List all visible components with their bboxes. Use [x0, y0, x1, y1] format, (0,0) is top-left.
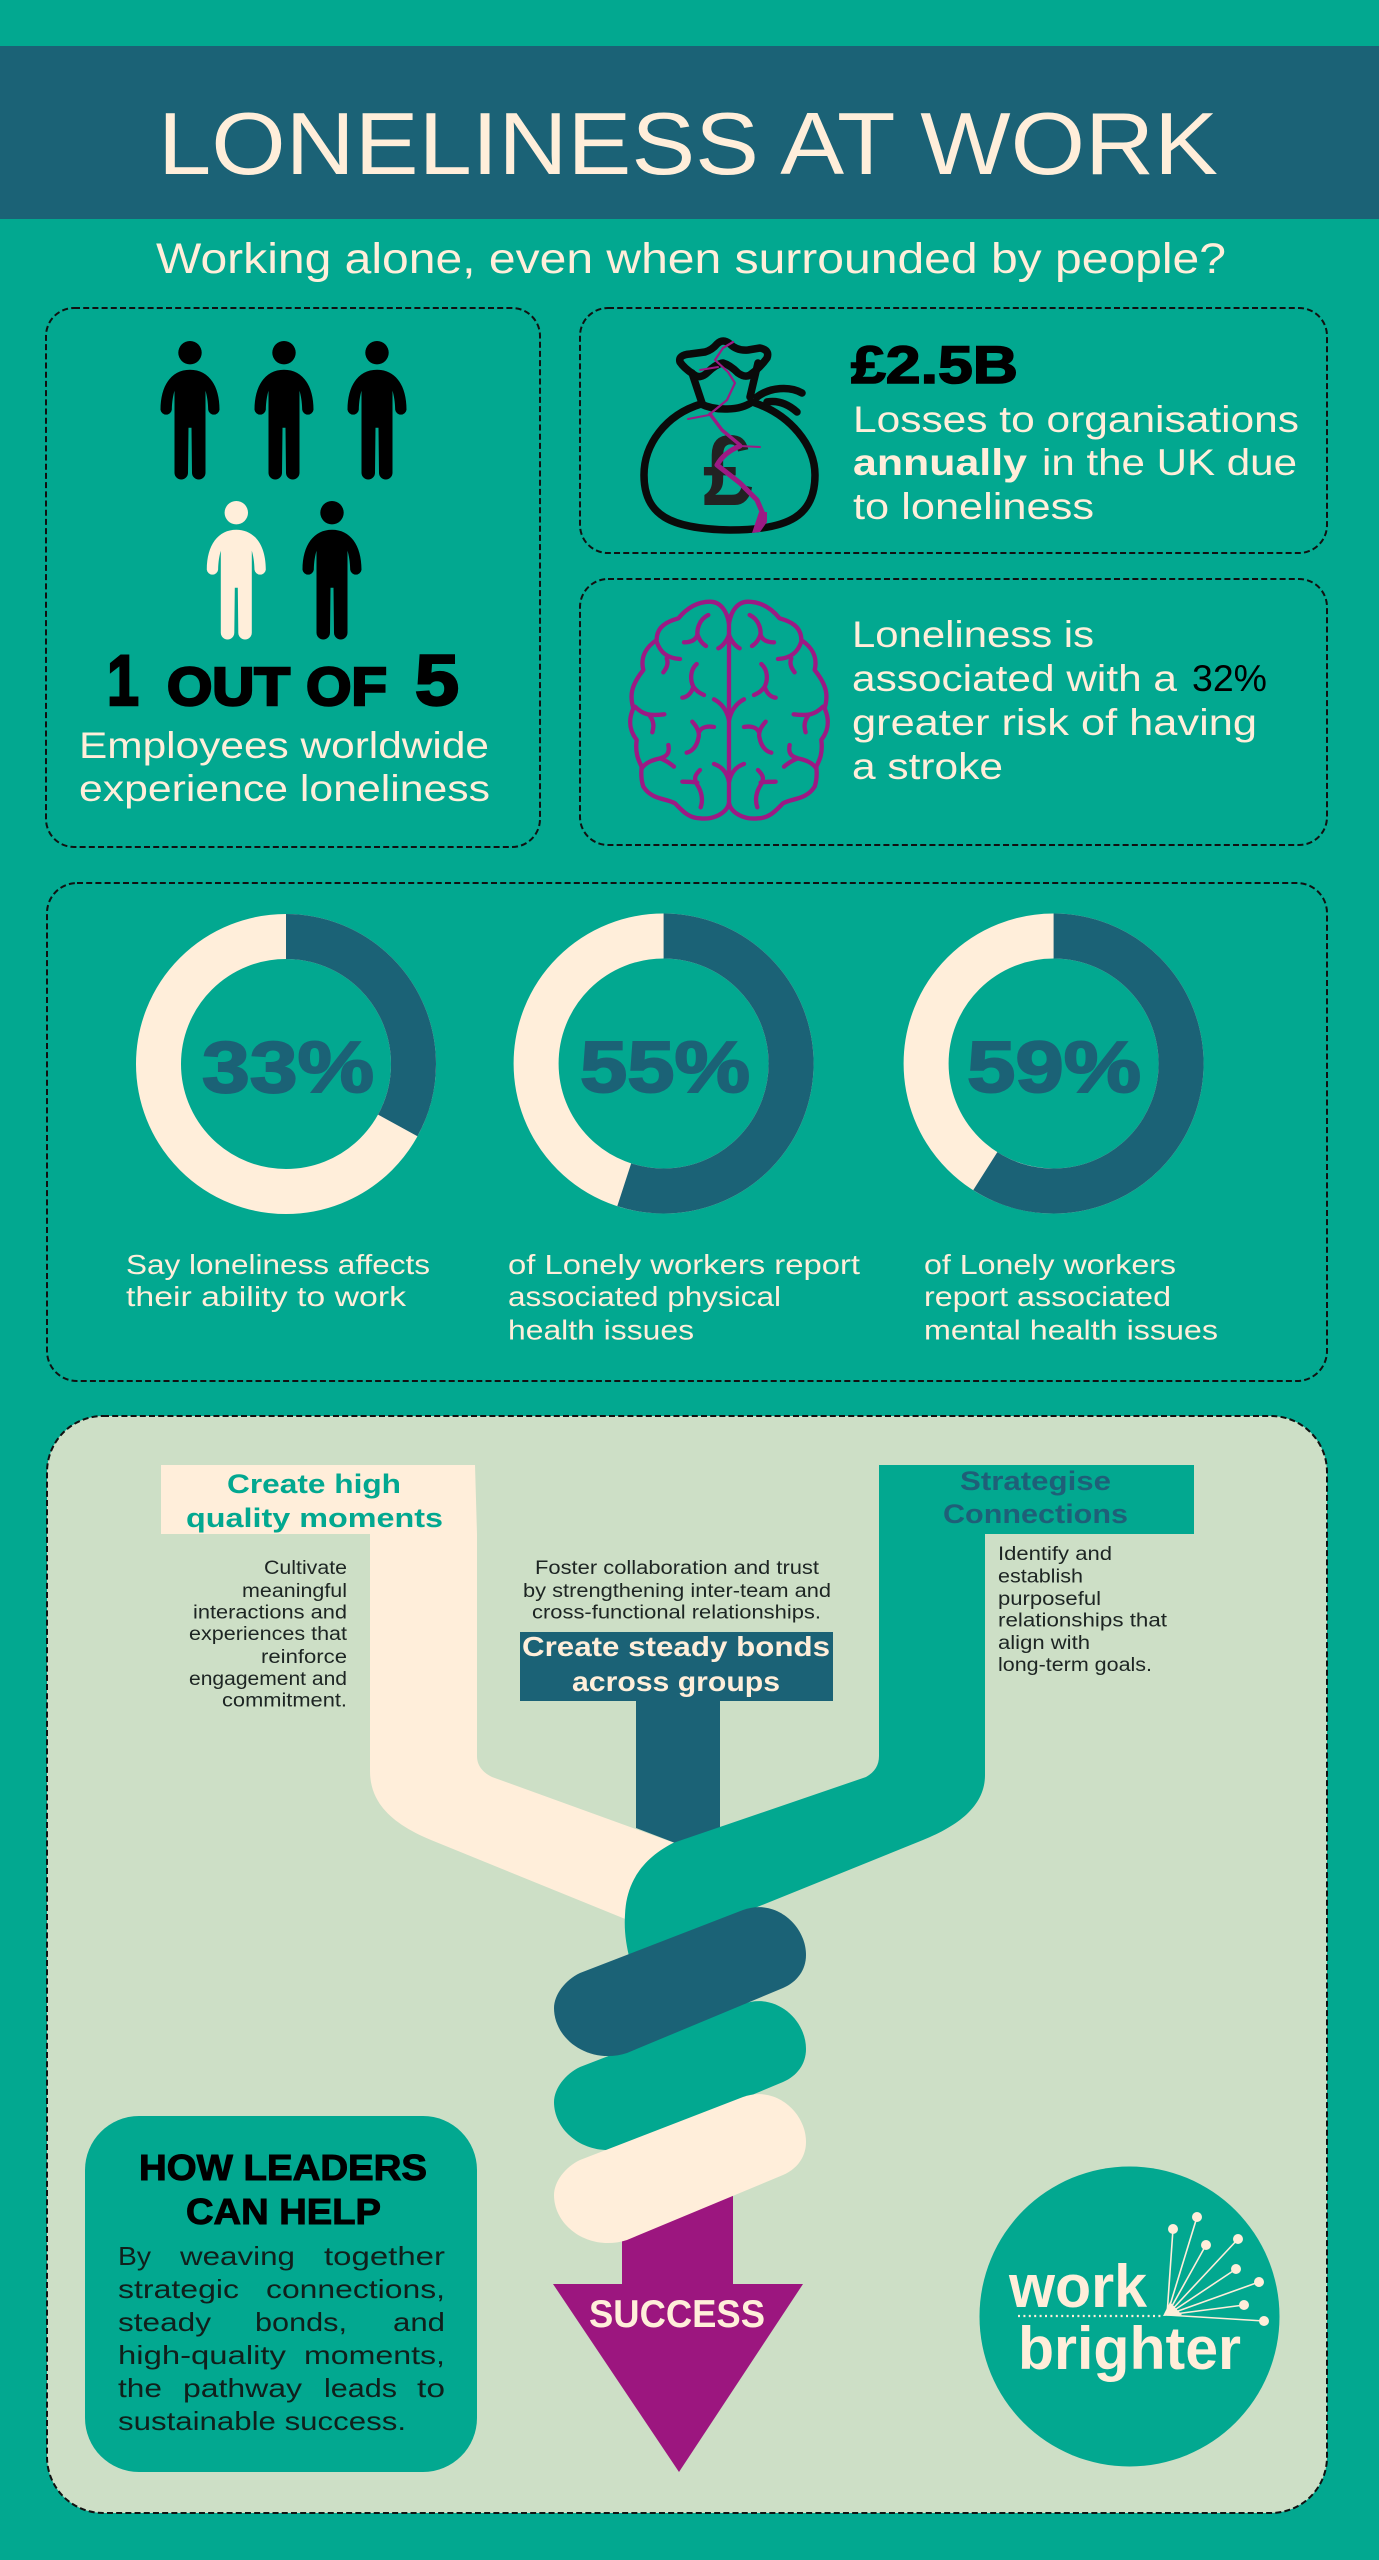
heading: strategise connections: Strategise: [960, 1466, 1111, 1496]
callout body: weaving: [179, 2241, 295, 2271]
callout body: [118, 2241, 445, 2436]
text: cultivate meaningful interactions: [189, 1558, 348, 1712]
icon: five people, one highlighted: [160, 341, 406, 639]
text: identify purposeful relationships: Identify and: [998, 1544, 1112, 1565]
callout body: moments,: [304, 2340, 445, 2370]
icon: brain: [630, 602, 828, 819]
text: cultivate meaningful interactions: engagement and: [189, 1669, 347, 1690]
caption: employees worldwide: Employees worldwide: [79, 725, 489, 766]
text: identify purposeful relationships: establish: [998, 1566, 1083, 1588]
text: losses to organisations: Losses to organisations: [853, 399, 1299, 440]
donut chart: 59%: 59%: [967, 1028, 1141, 1108]
callout body: leads: [324, 2373, 397, 2403]
arrow: success: [553, 2190, 803, 2472]
text: losses to organisations: annually: [853, 442, 1027, 483]
logo: work brighter: [980, 2166, 1280, 2466]
statistic: £2.5B: £2.5B: [851, 336, 1018, 395]
callout body: By: [118, 2241, 151, 2271]
caption: 59%: of Lonely workers: [924, 1249, 1176, 1280]
callout body: to: [417, 2373, 445, 2403]
caption: 55%: associated physical: [508, 1281, 781, 1312]
statistic: 1 out of 5: 5: [415, 642, 459, 721]
text: identify purposeful relationships: [998, 1544, 1168, 1676]
text: identify purposeful relationships: purposeful: [998, 1589, 1101, 1610]
strand: cream: [161, 1465, 680, 1925]
panel: 1 out of 5 employees: [46, 308, 540, 847]
text: foster collaboration: cross-functional relationships.: [532, 1602, 821, 1624]
statistic: 1 out of 5: [107, 642, 459, 721]
title: LONELINESS AT WORK: [158, 94, 1218, 193]
callout heading: CAN HELP: [186, 2191, 381, 2232]
text: losses to organisations: in the UK due: [1042, 442, 1297, 483]
callout body: high-quality: [118, 2340, 286, 2370]
callout body: strategic: [118, 2274, 239, 2304]
heading: create high quality moments: [186, 1469, 443, 1533]
arrow: success: SUCCESS: [589, 2293, 765, 2336]
text: foster collaboration: Foster collaboration and trust: [535, 1558, 820, 1579]
donut chart: 55%: 55%: [580, 1028, 750, 1108]
caption: 33%: their ability to work: [126, 1281, 406, 1312]
caption: 33%: [126, 1249, 430, 1312]
icon: cracked money bag: [644, 341, 815, 533]
caption: 59%: [924, 1249, 1218, 1346]
caption: 59%: report associated: [924, 1281, 1171, 1312]
text: losses to organisations: [853, 399, 1299, 527]
heading: create high quality moments: Create high: [227, 1469, 401, 1499]
header band: [0, 46, 1379, 219]
text: cultivate meaningful interactions: commitment.: [222, 1690, 347, 1712]
statistic: 1 out of 5: OUT OF: [167, 657, 387, 717]
text: stroke risk: 32%: [1192, 658, 1267, 699]
text: cultivate meaningful interactions: reinforce: [261, 1647, 347, 1668]
panel: donut statistics: [47, 883, 1327, 1381]
callout body: the: [118, 2373, 162, 2403]
panel: stroke risk: [580, 579, 1327, 845]
caption: 55%: [508, 1249, 860, 1346]
heading: create steady bonds: across groups: [572, 1666, 780, 1697]
donut chart: 33%: [158, 936, 414, 1192]
text: cultivate meaningful interactions: interactions and: [193, 1602, 347, 1624]
text: cultivate meaningful interactions: experiences that: [189, 1624, 348, 1645]
callout body: pathway: [183, 2373, 302, 2403]
text: stroke risk: greater risk of having: [852, 702, 1257, 743]
text: identify purposeful relationships: relationships that: [998, 1610, 1168, 1632]
donut chart: 55%: [536, 936, 791, 1191]
heading: create steady bonds: Create steady bonds: [522, 1631, 830, 1662]
text: stroke risk: [852, 614, 1267, 787]
text: foster collaboration: by strengthening inter-team and: [523, 1581, 831, 1602]
donut chart: 33%: 33%: [202, 1028, 374, 1108]
text: cultivate meaningful interactions: Cultivate: [264, 1558, 347, 1579]
callout heading: [139, 2147, 427, 2232]
callout body: connections,: [266, 2274, 445, 2304]
caption: 55%: of Lonely workers report: [508, 1249, 860, 1280]
twist: cream pill: [554, 2094, 806, 2243]
text: stroke risk: associated with a: [852, 658, 1177, 699]
statistic: 1 out of 5: 1: [107, 642, 139, 721]
caption: 55%: health issues: [508, 1314, 694, 1346]
callout body: bonds,: [255, 2307, 347, 2337]
caption: 59%: mental health issues: [924, 1314, 1218, 1346]
text: stroke risk: Loneliness is: [852, 614, 1094, 655]
logo: work brighter: brighter: [1018, 2315, 1241, 2382]
callout heading: HOW LEADERS: [139, 2147, 427, 2188]
twist: green pill: [554, 2001, 806, 2150]
logo: work brighter: work: [1008, 2253, 1148, 2320]
text: identify purposeful relationships: long-term goals.: [998, 1655, 1152, 1676]
text: foster collaboration: [523, 1558, 831, 1624]
strand: dark blue: [520, 1632, 833, 1846]
callout body: and: [393, 2307, 445, 2337]
twist: blue pill: [554, 1907, 806, 2056]
caption: 33%: Say loneliness affects: [126, 1249, 430, 1280]
heading: strategise connections: Connections: [943, 1499, 1128, 1529]
subtitle: Working alone, even when surrounded by people?: [156, 235, 1226, 283]
caption: employees worldwide: [79, 725, 490, 809]
strand: green: [625, 1465, 1194, 1960]
callout body: together: [324, 2241, 445, 2271]
donut chart: 59%: [926, 936, 1181, 1191]
heading: create steady bonds: [522, 1631, 830, 1697]
icon: cracked money bag: £: [703, 415, 753, 527]
callout body: sustainable success.: [118, 2406, 406, 2436]
heading: strategise connections: [943, 1466, 1128, 1529]
text: identify purposeful relationships: align with: [998, 1633, 1090, 1654]
callout: how leaders can help: [85, 2116, 477, 2472]
callout body: steady: [118, 2307, 211, 2337]
text: losses to organisations: to loneliness: [853, 486, 1094, 527]
text: stroke risk: a stroke: [852, 746, 1003, 787]
panel: how leaders can help: [47, 1416, 1327, 2513]
text: cultivate meaningful interactions: meaningful: [242, 1581, 347, 1602]
panel: financial loss: [580, 308, 1327, 553]
heading: create high quality moments: quality moments: [186, 1503, 443, 1533]
caption: employees worldwide: experience loneliness: [79, 768, 490, 809]
